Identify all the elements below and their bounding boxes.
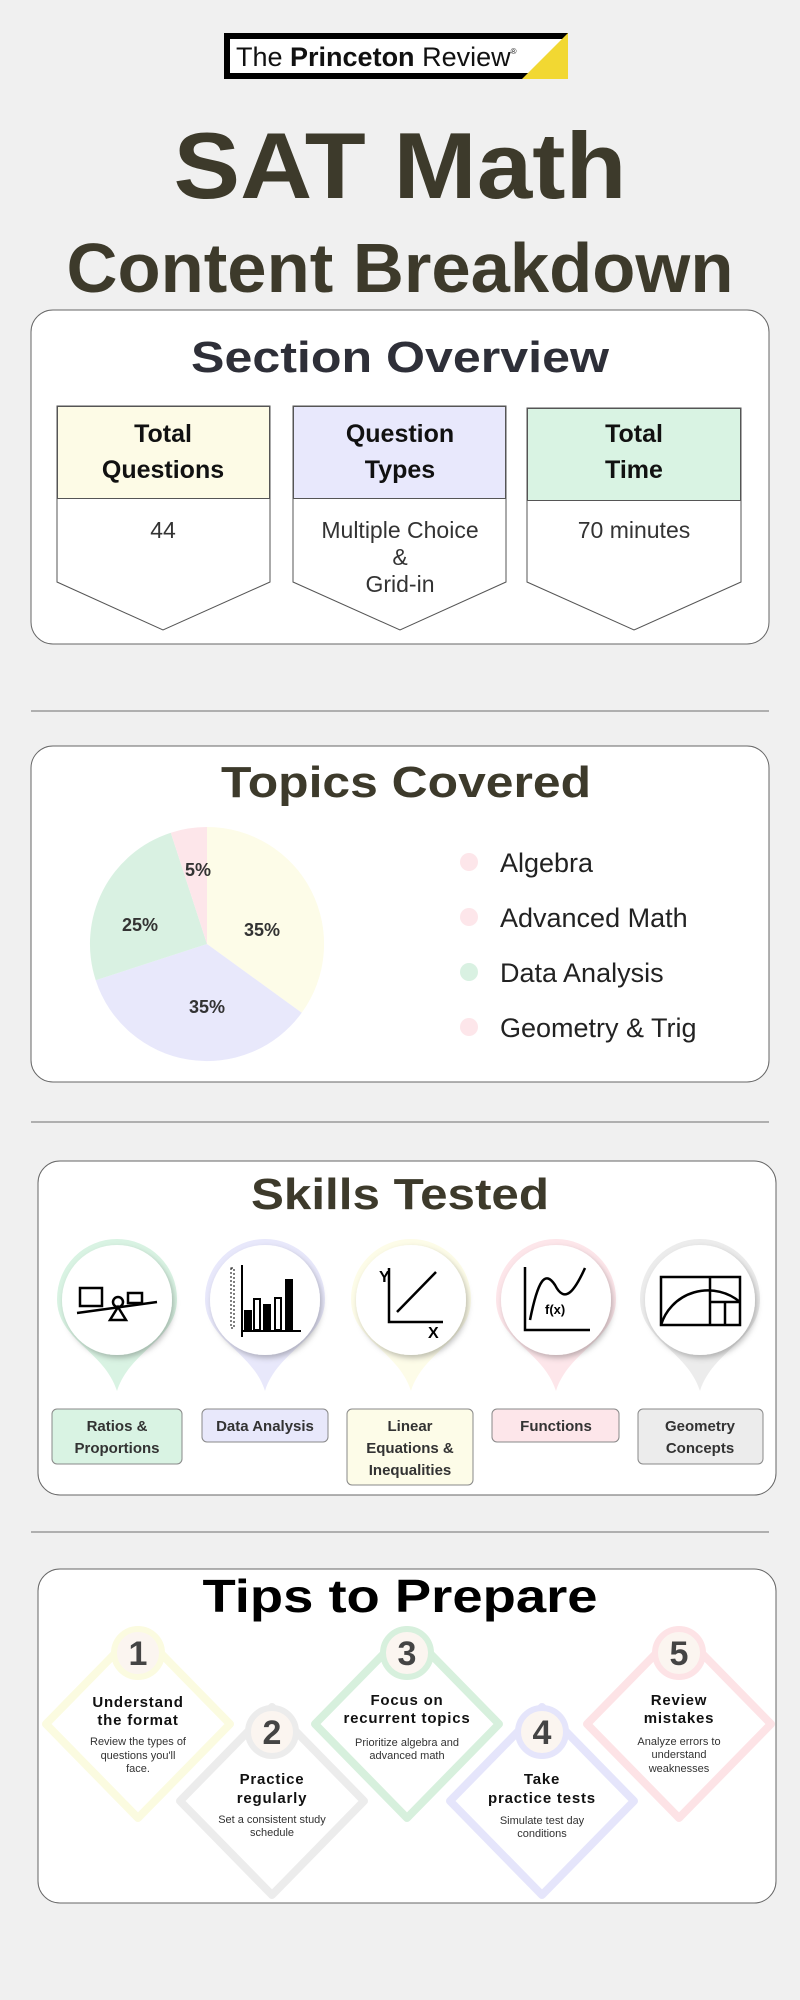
card: question types [293,406,506,630]
card: question types: Grid-in [365,571,435,597]
card: total questions: Total [134,420,192,448]
logo [227,33,568,79]
tip texts: Focus on [370,1692,444,1709]
card: total time: 70 minutes [578,517,690,543]
tip texts: advanced math [369,1750,445,1762]
tip texts: face. [126,1763,150,1775]
legend: Geometry & Trig [500,1013,697,1043]
panel: topics covered [31,746,769,1082]
tip texts: Set a consistent study [218,1814,326,1826]
panel: section overview [31,310,769,644]
tip texts: schedule [250,1827,294,1839]
title: SAT Math [174,113,626,218]
tip texts: the format [97,1712,179,1729]
tip texts: Analyze errors to [637,1736,721,1748]
number badges: 2 [263,1714,281,1752]
diamonds [46,1630,771,1895]
card: total questions: 44 [150,517,176,543]
card: total questions: Questions [102,456,224,484]
card: question types: Types [365,456,435,484]
icon: functions [496,1239,616,1391]
title [66,113,734,307]
icon: linear equations [351,1239,471,1391]
card: total time: Total [605,420,663,448]
skill labels: Data Analysis [216,1418,314,1435]
icon: linear equations: Y [379,1269,390,1286]
icon: ratios [57,1239,177,1391]
icon: geometry [640,1239,760,1391]
legend: Data Analysis [500,958,664,988]
tip texts: mistakes [644,1710,714,1727]
legend: Algebra [500,848,594,878]
tip texts: conditions [517,1828,567,1840]
skill labels: Functions [520,1418,592,1435]
heading: topics covered: Topics Covered [221,758,591,807]
pie chart: 35% [189,997,225,1017]
card: question types: & [392,544,408,570]
tip texts: recurrent topics [344,1710,470,1727]
tip texts: regularly [237,1790,307,1807]
logo: The Princeton Review [236,42,511,72]
icon: functions: f(x) [545,1302,565,1317]
heading: tips: Tips to Prepare [202,1570,598,1622]
pie chart: 35% [244,920,280,940]
skill labels: Concepts [666,1440,734,1457]
card: question types: Question [346,420,454,448]
card: total questions [57,406,270,630]
title: Content Breakdown [66,229,734,307]
pie chart: 5% [185,860,211,880]
skill labels: Ratios & [87,1418,148,1435]
logo: ® [511,47,517,56]
card: total time: Time [605,456,663,484]
skill labels: Linear [387,1418,433,1435]
card: question types: Multiple Choice [321,517,479,543]
number badges: 3 [398,1635,416,1673]
legend [460,848,697,1043]
legend: Advanced Math [500,903,688,933]
tip texts: Review the types of [90,1736,187,1748]
tip texts: Prioritize algebra and [355,1737,459,1749]
icon: data analysis [205,1239,325,1391]
skill labels: Geometry [665,1418,736,1435]
skill labels [52,1409,763,1485]
tip texts: questions you'll [101,1750,175,1762]
tip texts: weaknesses [648,1763,710,1775]
card: total time [527,408,741,630]
tip texts: Take [524,1771,560,1788]
skill labels: Proportions [74,1440,160,1457]
heading: section overview: Section Overview [191,333,610,382]
number badges [114,1629,703,1756]
pie chart: 25% [122,915,158,935]
tip texts: Practice [240,1771,304,1788]
skill labels: Equations & [366,1440,454,1457]
tip texts: Simulate test day [500,1815,585,1827]
tip texts: practice tests [488,1790,596,1807]
pie chart [90,827,324,1061]
number badges: 5 [670,1635,688,1673]
panel: tips to prepare [38,1569,776,1903]
tip texts: Understand [92,1694,184,1711]
number badges: 4 [533,1714,552,1752]
panel: skills tested [38,1161,776,1495]
tip texts: Review [651,1692,707,1709]
tip texts: understand [651,1749,707,1761]
tip texts [90,1692,721,1840]
heading: skills tested: Skills Tested [251,1170,549,1219]
skill labels: Inequalities [369,1462,451,1479]
icon: linear equations: X [428,1325,439,1342]
number badges: 1 [129,1635,147,1673]
